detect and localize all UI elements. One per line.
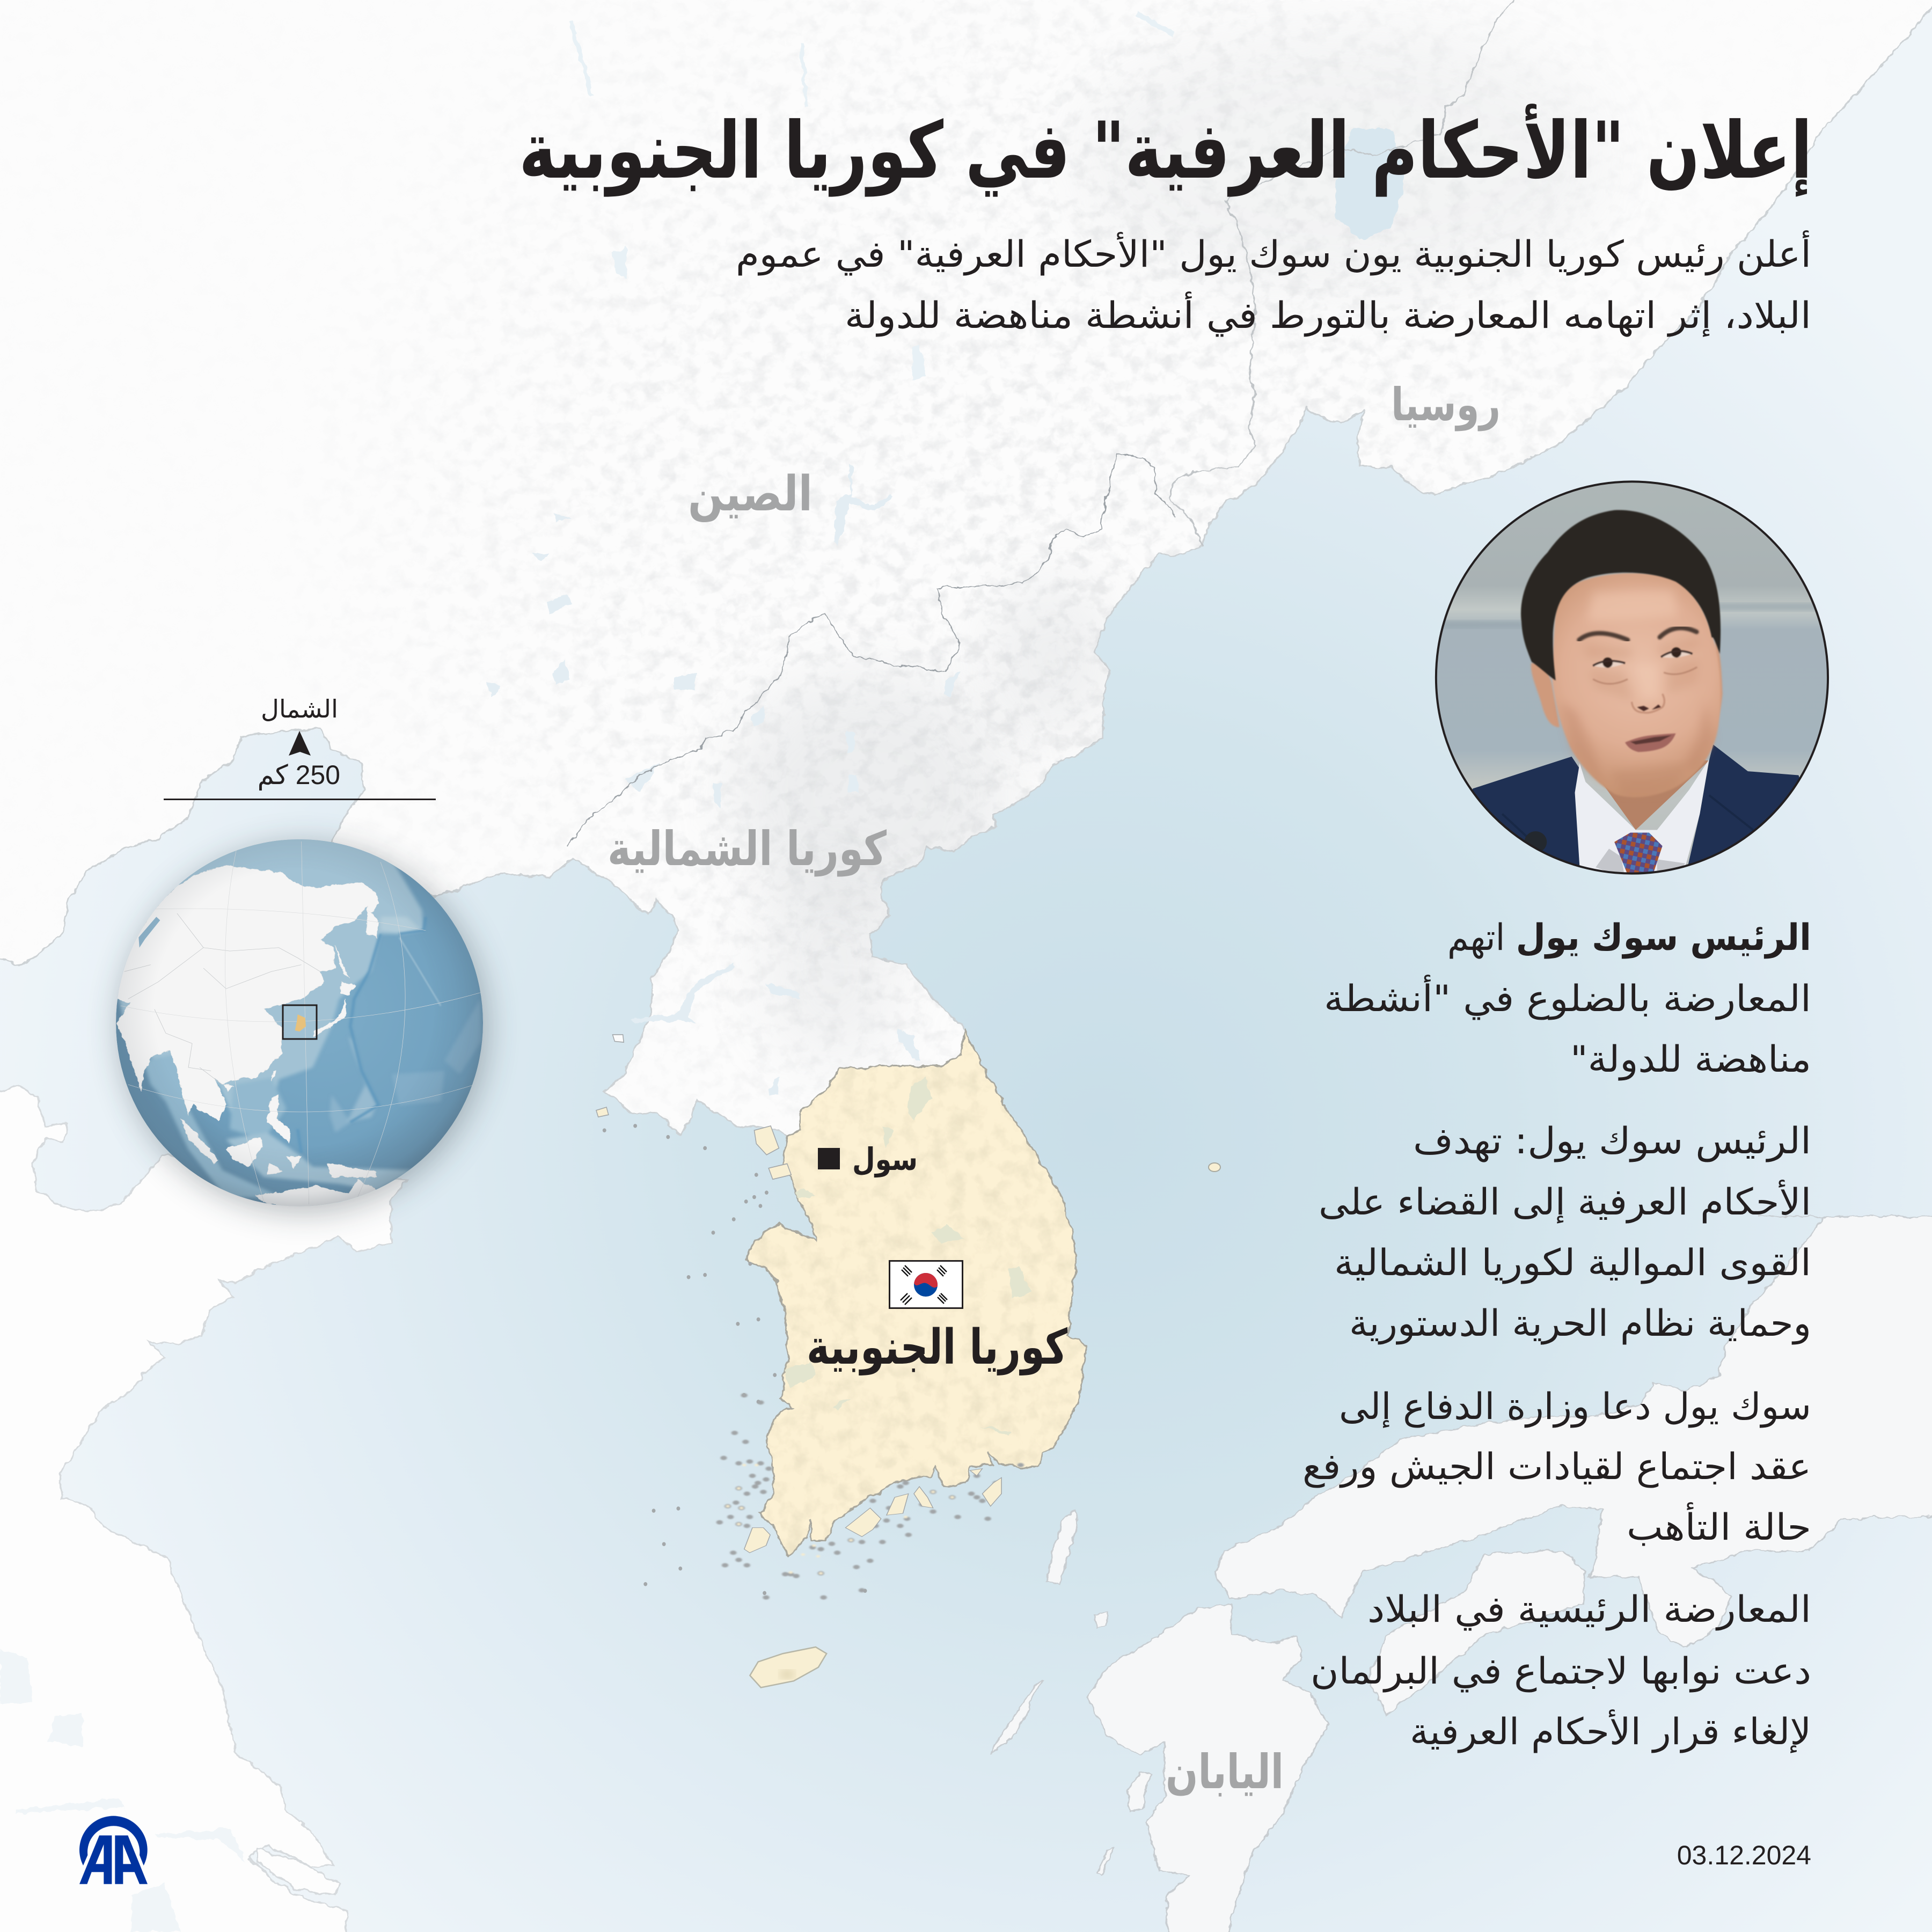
Seoul marker <box>818 1141 918 1178</box>
globe inset <box>113 835 487 1212</box>
point 1 <box>1324 917 1811 1081</box>
label: Russia: روسيا <box>1391 378 1501 431</box>
Seoul marker: سول <box>852 1141 918 1178</box>
shirt <box>1575 759 1709 878</box>
map labels <box>608 378 1501 1799</box>
point 3 <box>1302 1386 1811 1549</box>
compass and scale <box>164 694 436 800</box>
lakes and rivers <box>0 11 1403 1931</box>
Kyushu <box>1088 1604 1329 1932</box>
island: Ulleungdo <box>1209 1163 1220 1172</box>
scale bar <box>164 799 436 800</box>
point 3: حالة التأهب <box>1627 1502 1811 1549</box>
small islands <box>990 1613 1150 1875</box>
point 2: الأحكام العرفية إلى القضاء على <box>1319 1180 1811 1224</box>
globe land <box>113 866 399 1211</box>
date: 03.12.2024 <box>1677 1840 1811 1870</box>
Shikoku <box>1367 1550 1585 1715</box>
intro paragraph: البلاد، إثر اتهامه المعارضة بالتورط في أنشطة مناهضة للدولة <box>845 291 1811 337</box>
globe seamount chain <box>399 938 441 1006</box>
flag of South Korea <box>890 1261 963 1308</box>
Tsushima <box>1047 1510 1078 1584</box>
peninsulas and large islands on the south coast <box>744 1469 1001 1553</box>
point 2: وحماية نظام الحرية الدستورية <box>1349 1302 1811 1345</box>
eyebrows <box>1579 628 1696 640</box>
neck <box>1582 755 1709 830</box>
point 1: المعارضة بالضلوع في "أنشطة <box>1324 975 1811 1020</box>
north arrow <box>289 731 311 756</box>
island: Jeju <box>750 1647 826 1687</box>
point 2: الرئيس سوك يول: تهدف <box>1413 1120 1811 1162</box>
point 4: دعت نوابها لاجتماع في البرلمان <box>1311 1650 1811 1693</box>
label: South Korea: كوريا الجنوبية <box>807 1319 1068 1375</box>
eyes <box>1593 647 1697 684</box>
land: Chongming island <box>258 1849 339 1894</box>
chin shadow <box>1609 763 1689 798</box>
point 4: المعارضة الرئيسية في البلاد <box>1367 1589 1811 1631</box>
South Korea on the globe <box>295 1014 306 1031</box>
globe country lines <box>125 913 320 1085</box>
islands: west coast of Korea <box>596 1035 865 1593</box>
land: eastern China coast <box>0 1086 408 1932</box>
nose and mouth <box>1625 694 1676 752</box>
globe shelves <box>113 835 482 1197</box>
Honshu <box>1215 1217 1932 1648</box>
ears <box>1531 638 1723 727</box>
tie <box>1614 832 1663 878</box>
point 4 <box>1311 1589 1811 1753</box>
point 2 <box>1319 1120 1811 1345</box>
South Korea highlighted <box>745 1028 1087 1557</box>
globe locator box <box>283 1005 317 1039</box>
globe caspian sea <box>138 917 160 948</box>
suit <box>1433 744 1833 878</box>
portrait photo <box>1433 478 1833 878</box>
label: China: الصين <box>688 466 813 522</box>
point 3: سوك يول دعا وزارة الدفاع إلى <box>1339 1386 1811 1428</box>
logo: Anadolu Agency <box>79 1816 148 1884</box>
point 3: عقد اجتماع لقيادات الجيش ورفع <box>1302 1446 1811 1488</box>
point 4: لإلغاء قرار الأحكام العرفية <box>1410 1709 1811 1753</box>
point 1: مناهضة للدولة" <box>1570 1038 1811 1081</box>
border lines <box>568 0 1514 847</box>
label: Japan: اليابان <box>1166 1744 1284 1799</box>
body text <box>1302 917 1811 1753</box>
globe trench lines <box>298 917 426 1153</box>
face <box>1552 573 1721 798</box>
hair <box>1521 510 1721 680</box>
point 2: القوى الموالية لكوريا الشمالية <box>1334 1242 1811 1284</box>
intro paragraph: أعلن رئيس كوريا الجنوبية يون سوك يول "الأحكام العرفية" في عموم <box>736 230 1811 276</box>
coastal islands: south and west of South Korea <box>720 1395 1021 1598</box>
north label: الشمال <box>261 694 338 723</box>
point 1: الرئيس سوك يول اتهم <box>1447 917 1811 959</box>
scale label: 250 كم <box>258 760 340 791</box>
label: North Korea: كوريا الشمالية <box>608 821 887 877</box>
land: Japan <box>990 1217 1932 1932</box>
intro paragraph <box>736 230 1811 337</box>
microphone <box>1525 831 1547 853</box>
terrain relief texture <box>455 1 1626 1110</box>
